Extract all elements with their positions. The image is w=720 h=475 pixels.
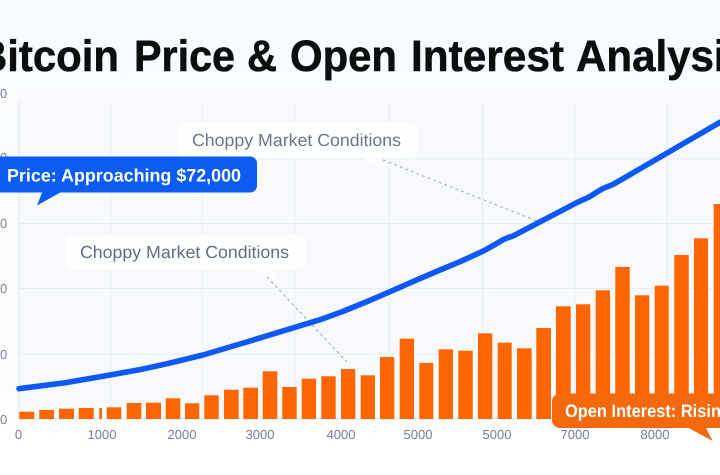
y axis labels: 0 (0, 216, 7, 231)
x axis labels: 5000 (404, 427, 432, 442)
y axis labels: 0 (0, 150, 7, 165)
title (0, 32, 720, 81)
title: Price (134, 32, 235, 81)
chart plot background (18, 90, 720, 419)
title: & (247, 32, 277, 81)
callout: lower choppy market conditions (65, 235, 305, 283)
callout: price approaching 72000 (0, 156, 257, 206)
callout: lower choppy market conditions: Choppy Market Conditions (80, 242, 289, 262)
title: Interest (411, 32, 564, 81)
x axis labels: 0 (15, 427, 22, 442)
y axis labels (0, 86, 7, 427)
callout: price approaching 72000: Price: Approaching $72,000 (7, 166, 241, 186)
y axis labels: 0 (0, 281, 7, 296)
x axis labels (15, 427, 669, 442)
connector: upper callout to price line (383, 160, 537, 221)
x axis labels: 4000 (327, 427, 355, 442)
x axis labels: 7000 (561, 427, 589, 442)
title: Open (290, 32, 397, 81)
y axis labels: 0 (0, 86, 7, 101)
callout: upper choppy market conditions: Choppy Market Conditions (192, 130, 401, 150)
price line (19, 122, 720, 389)
callout: open interest rising (552, 394, 720, 441)
x axis labels: 3000 (246, 427, 274, 442)
x axis labels: 1000 (88, 427, 116, 442)
callout: upper choppy market conditions (177, 122, 417, 171)
y axis labels: 0 (0, 412, 7, 427)
connector: lower callout to bar (267, 277, 347, 362)
x axis labels: 2000 (168, 427, 196, 442)
bar chart: open interest (19, 204, 720, 419)
x axis labels: 5000 (483, 427, 511, 442)
y axis labels: 0 (0, 347, 7, 362)
x axis labels: 8000 (641, 427, 669, 442)
